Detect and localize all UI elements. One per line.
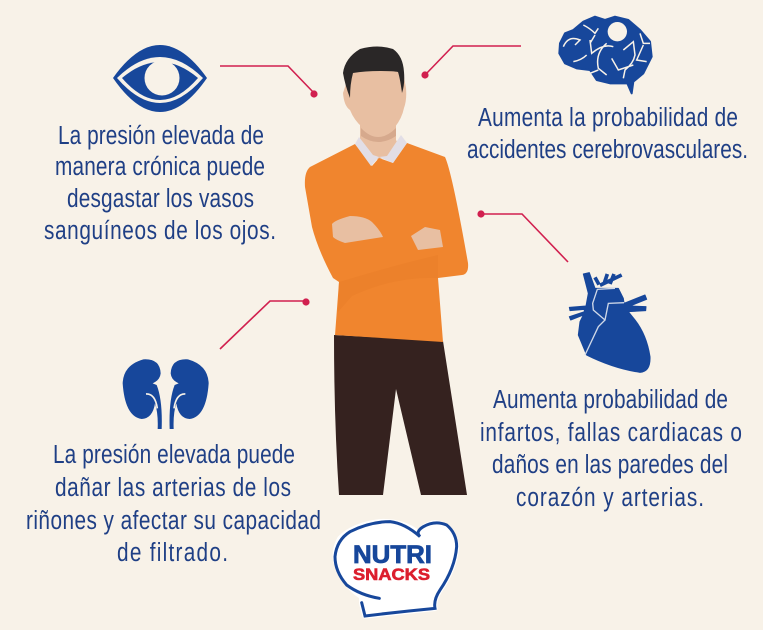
text block: eye: desgastar los vasos — [67, 184, 254, 213]
text block: kidneys: dañar las arterias de los — [55, 473, 291, 502]
text block: kidneys: de filtrado. — [117, 538, 228, 567]
text block: heart: corazón y arterias. — [516, 483, 704, 512]
text block: kidneys — [26, 440, 321, 567]
text block: brain: accidentes cerebrovasculares. — [467, 135, 748, 164]
brain folds — [563, 25, 650, 78]
logo: Nutri Snacks: SNACKS — [353, 566, 430, 584]
head — [343, 66, 406, 135]
sweater fold shading — [338, 255, 438, 312]
icon: kidneys — [123, 359, 209, 429]
sweater — [305, 143, 468, 342]
right hand — [411, 227, 443, 250]
text block: eye: La presión elevada de — [58, 121, 264, 150]
hair — [343, 46, 404, 98]
heart upper vessels — [595, 274, 622, 285]
text block: eye: sanguíneos de los ojos. — [44, 216, 276, 245]
icon: heart — [569, 273, 650, 372]
text block: brain — [467, 103, 748, 164]
text block: kidneys: La presión elevada puede — [53, 440, 295, 469]
connector: heart — [477, 210, 568, 262]
brain hole — [608, 22, 627, 41]
connector: eye — [220, 66, 318, 98]
text block: eye: manera crónica puede — [55, 152, 265, 181]
collar — [355, 135, 407, 166]
text block: heart: daños en las paredes del — [492, 450, 728, 479]
left hand — [332, 216, 383, 243]
icon: brain — [559, 17, 652, 93]
text block: heart — [480, 385, 742, 512]
icon: eye — [113, 45, 207, 112]
text block: kidneys: riñones y afectar su capacidad — [26, 506, 321, 535]
text block: heart: Aumenta probabilidad de — [493, 385, 728, 414]
person figure — [305, 46, 468, 495]
heart vessel lines — [585, 288, 624, 355]
connector: brain — [421, 46, 521, 79]
text block: brain: Aumenta la probabilidad de — [478, 103, 738, 132]
text block: heart: infartos, fallas cardiacas o — [480, 418, 742, 447]
text block: eye — [44, 121, 276, 245]
logo hat — [335, 522, 457, 616]
logo: Nutri Snacks — [335, 522, 457, 616]
neck — [356, 118, 402, 160]
logo: Nutri Snacks: NUTRI — [353, 541, 432, 569]
connector: kidneys — [220, 298, 310, 349]
trousers — [334, 335, 467, 495]
